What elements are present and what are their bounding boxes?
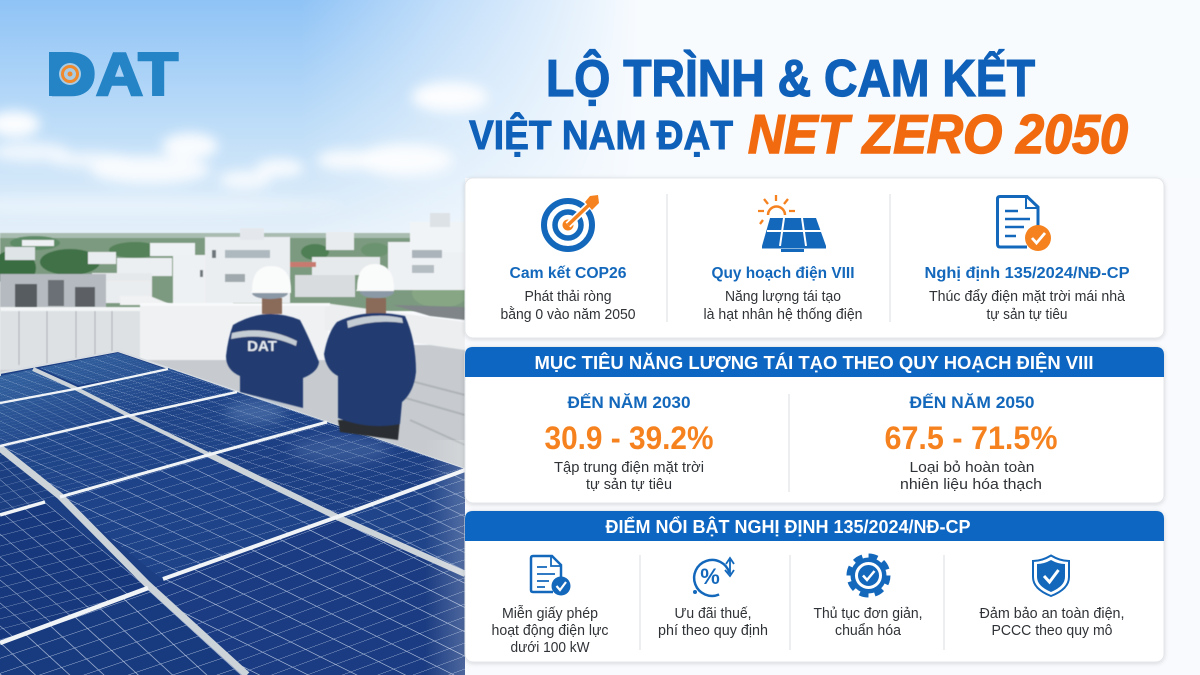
panel: commitments xyxy=(465,178,1164,338)
icon: document with check xyxy=(998,196,1051,251)
commitment: COP26: bằng 0 vào năm 2050 xyxy=(500,306,636,323)
worker left with DAT jacket xyxy=(226,266,319,408)
icon: document with check xyxy=(531,556,570,596)
icon: gear with check xyxy=(849,556,888,595)
target 2050: Loại bỏ hoàn toàn xyxy=(910,459,1034,476)
title: LỘ TRÌNH & CAM KẾT xyxy=(546,49,1035,108)
commitment: decree 135: tự sản tự tiêu xyxy=(986,306,1068,323)
target 2050: 67.5 - 71.5% xyxy=(884,420,1058,456)
highlight: licence exemption xyxy=(492,556,609,656)
highlight: licence exemption: Miễn giấy phép xyxy=(502,605,598,622)
town skyline xyxy=(0,213,468,311)
highlight: simple procedures: chuẩn hóa xyxy=(835,622,902,639)
panel header xyxy=(465,347,1164,377)
icon: shield with check xyxy=(1033,556,1069,596)
commitment: power plan VIII: Năng lượng tái tạo xyxy=(725,288,841,305)
rails xyxy=(33,369,208,454)
panel header xyxy=(465,511,1164,541)
commitment: decree 135: Thúc đẩy điện mặt trời mái nhà xyxy=(929,288,1126,305)
highlight: simple procedures xyxy=(814,556,922,639)
highlight: electrical and fire safety: PCCC theo quy mô xyxy=(992,622,1112,639)
target 2030: Tập trung điện mặt trời xyxy=(554,459,704,476)
target 2030: tự sản tự tiêu xyxy=(586,476,672,493)
title xyxy=(469,49,1128,165)
target 2030 xyxy=(544,393,714,493)
title: VIỆT NAM ĐẠT xyxy=(469,112,733,158)
target 2030: 30.9 - 39.2% xyxy=(544,420,714,456)
solar panels xyxy=(0,353,465,675)
commitment: decree 135: Nghị định 135/2024/NĐ-CP xyxy=(924,265,1130,282)
panel header: ĐIỂM NỔI BẬT NGHỊ ĐỊNH 135/2024/NĐ-CP xyxy=(606,516,970,537)
solar array base xyxy=(0,351,468,675)
commitment: power plan VIII xyxy=(704,195,862,323)
icon: percent with arrows: % xyxy=(700,564,720,589)
commitment: COP26 xyxy=(500,195,636,323)
title: NET ZERO 2050 xyxy=(748,103,1128,165)
right backdrop behind cards xyxy=(465,178,1200,675)
commitment: power plan VIII: là hạt nhân hệ thống điện xyxy=(704,306,862,323)
highlight: licence exemption: dưới 100 kW xyxy=(510,639,590,656)
clouds xyxy=(0,82,488,215)
target 2050 xyxy=(884,393,1058,493)
panel: decree highlights xyxy=(465,511,1164,662)
icon: target xyxy=(544,195,599,249)
logo: DAT: DAT xyxy=(49,41,178,108)
target 2050: ĐẾN NĂM 2050 xyxy=(910,393,1034,412)
target 2030: ĐẾN NĂM 2030 xyxy=(568,393,690,412)
highlight: electrical and fire safety xyxy=(980,556,1124,639)
panel header: MỤC TIÊU NĂNG LƯỢNG TÁI TẠO THEO QUY HOẠCH ĐIỆN VIII xyxy=(534,352,1094,373)
worker left with DAT jacket: DAT xyxy=(247,338,277,355)
commitment: decree 135 xyxy=(924,196,1130,323)
highlight: tax incentives xyxy=(658,553,768,639)
worker right xyxy=(324,264,416,440)
highlight: licence exemption: hoạt động điện lực xyxy=(492,622,609,639)
highlight: tax incentives: Ưu đãi thuế, xyxy=(674,605,752,622)
commitment: COP26: Cam kết COP26 xyxy=(510,265,627,282)
target 2050: nhiên liệu hóa thạch xyxy=(900,476,1042,493)
highlight: tax incentives: phí theo quy định xyxy=(658,622,768,639)
commitment: COP26: Phát thải ròng xyxy=(524,288,612,305)
highlight: electrical and fire safety: Đảm bảo an toàn điện, xyxy=(980,605,1124,622)
parapet wall and roof xyxy=(0,303,465,475)
commitment: power plan VIII: Quy hoạch điện VIII xyxy=(712,265,854,282)
highlight: simple procedures: Thủ tục đơn giản, xyxy=(814,605,922,622)
panel: renewable energy targets xyxy=(465,347,1164,503)
icon: sun and solar panel xyxy=(758,195,826,252)
